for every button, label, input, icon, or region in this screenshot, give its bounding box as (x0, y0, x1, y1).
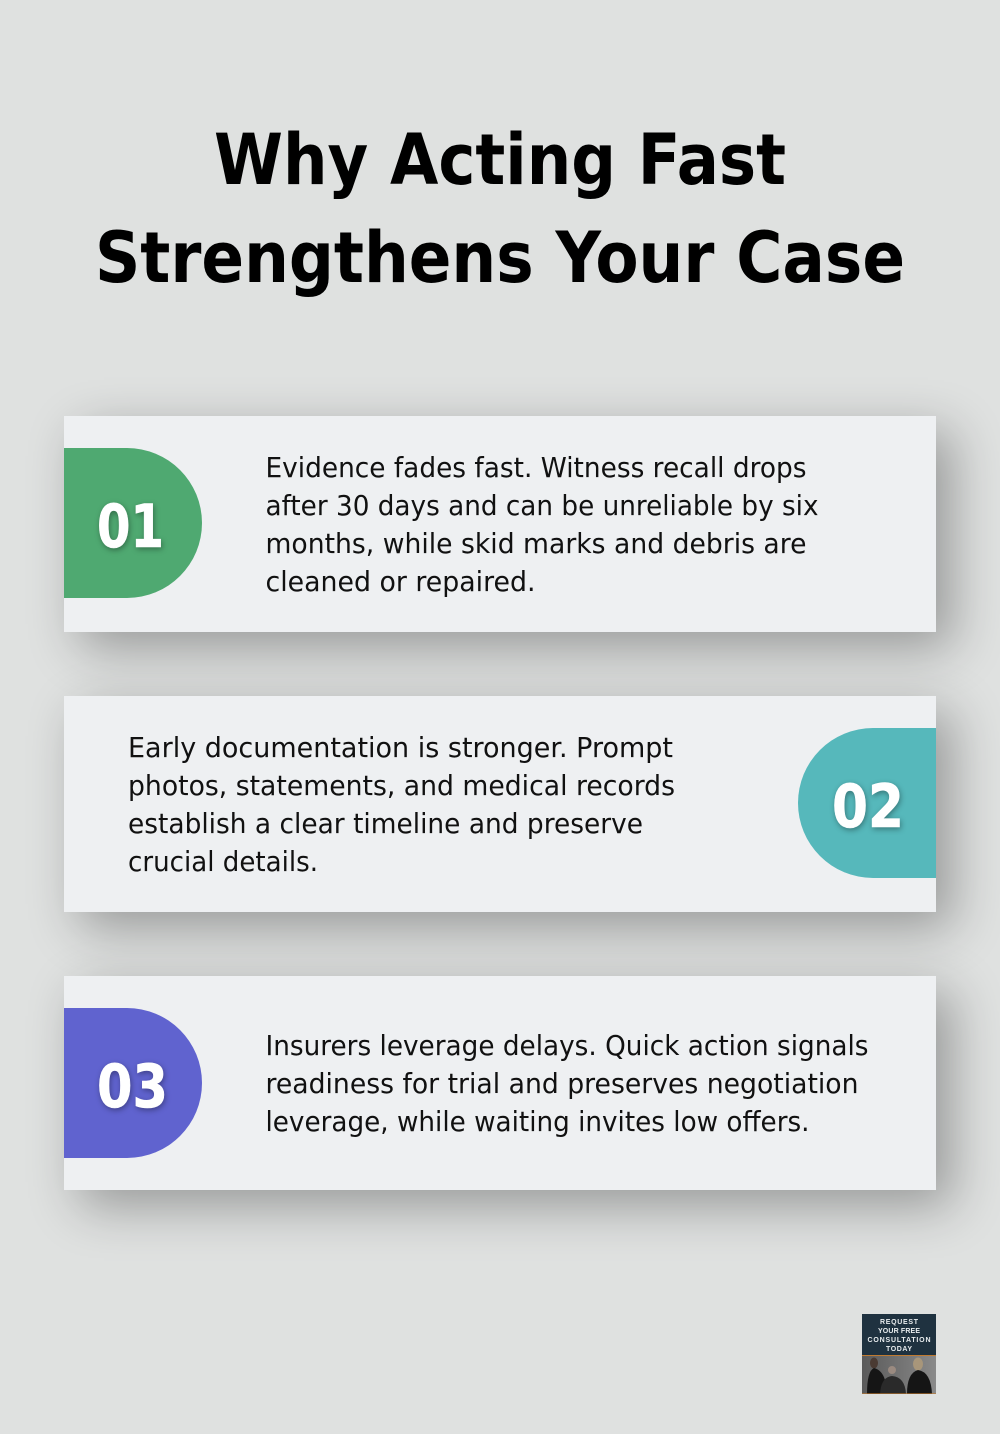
text: evidence fades fast: cleaned or repaired. (266, 565, 536, 598)
badge: 03 (64, 1008, 202, 1158)
consultation badge: YOUR FREE (878, 1328, 920, 1335)
title (95, 119, 905, 299)
text: early documentation: Early documentation is stronger. Prompt (128, 731, 673, 764)
text: insurers leverage delays: readiness for trial and preserves negotiation (266, 1067, 858, 1100)
text: evidence fades fast: Evidence fades fast. Witness recall drops (266, 451, 806, 484)
badge: 02: 02 (832, 772, 904, 842)
consultation badge: CONSULTATION (868, 1337, 930, 1344)
badge: 01: 01 (97, 492, 164, 562)
text: early documentation (128, 731, 675, 878)
consultation badge: REQUEST (880, 1319, 919, 1326)
panel: card 1 evidence (64, 416, 936, 632)
text: early documentation: crucial details. (128, 845, 318, 878)
badge: 03: 03 (97, 1052, 168, 1122)
title: Strengthens Your Case (95, 217, 905, 299)
text: early documentation: establish a clear timeline and preserve (128, 807, 643, 840)
badge: 01 (64, 448, 202, 598)
panel: card 3 insurers (64, 976, 936, 1190)
consultation badge: TODAY (886, 1346, 912, 1353)
text: evidence fades fast (266, 451, 818, 598)
title: Why Acting Fast (214, 119, 786, 201)
text: evidence fades fast: after 30 days and can be unreliable by six (266, 489, 818, 522)
text: evidence fades fast: months, while skid marks and debris are (266, 527, 806, 560)
text: insurers leverage delays: Insurers leverage delays. Quick action signals (266, 1029, 868, 1062)
badge: 02 (798, 728, 936, 878)
text: insurers leverage delays: leverage, while waiting invites low offers. (266, 1105, 810, 1138)
panel: card 2 documentation (64, 696, 936, 912)
text: early documentation: photos, statements, and medical records (128, 769, 675, 802)
text: insurers leverage delays (266, 1029, 868, 1138)
consultation badge (862, 1314, 936, 1394)
